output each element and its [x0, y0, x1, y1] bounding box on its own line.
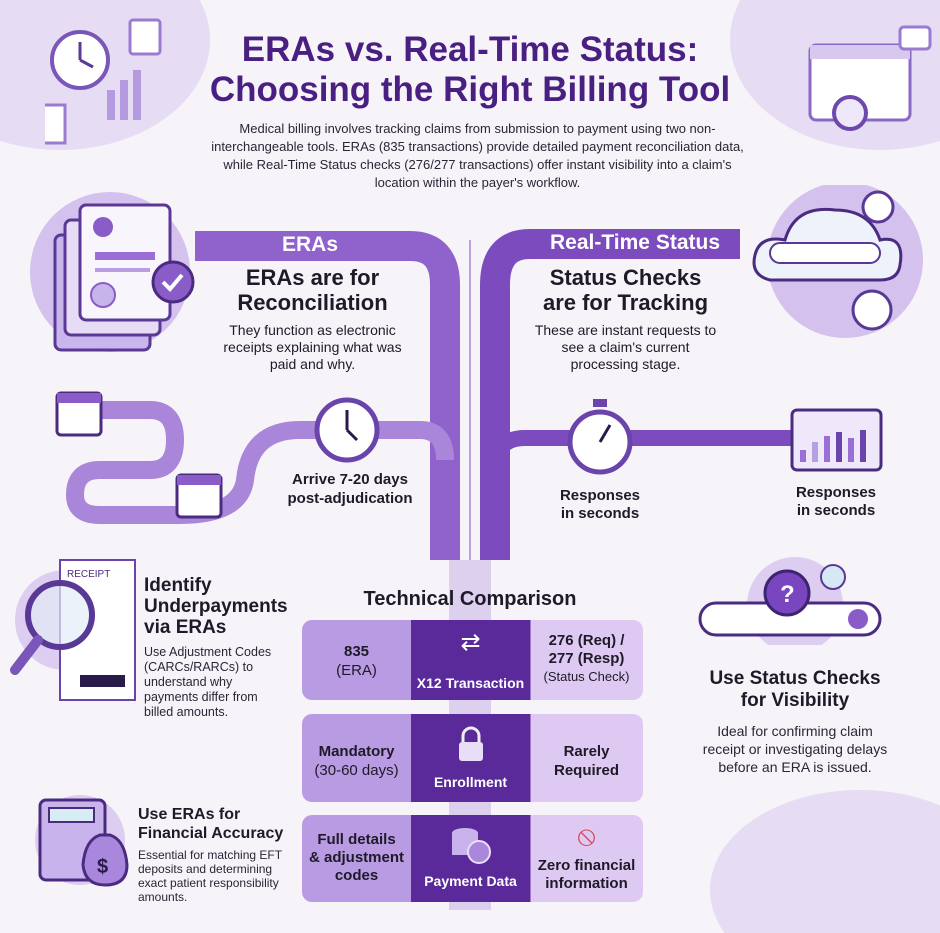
text block: identify underpayments: Use Adjustment Codes (CARCs/RARCs) to understand why payments differ from billed amounts.: [144, 645, 271, 719]
icon: ERA documents: [30, 192, 194, 352]
icon: calculator money bag: $: [97, 856, 108, 878]
title: ERAs vs. Real-Time Status:: [242, 30, 698, 69]
text block: ERAs reconciliation: [223, 265, 402, 372]
row: X12 transaction: (Status Check): [544, 669, 629, 684]
icon: calendars and clock: [56, 392, 380, 518]
text block: ERAs reconciliation: ERAs are for: [246, 265, 379, 290]
row: payment data: Full details: [317, 831, 396, 848]
text block: status checks visibility: Ideal for confirming claim: [717, 723, 873, 739]
text block: Status checks tracking: are for Tracking: [543, 290, 708, 315]
text block: financial accuracy: Essential for matching EFT deposits and determining exact patient responsibility amounts.: [138, 848, 282, 904]
row: enrollment: Enrollment: [434, 774, 507, 790]
row: X12 transaction: [302, 620, 643, 700]
text block: Status checks tracking: These are instant requests to see a claim's current processing stage.: [535, 322, 716, 372]
row: payment data: [302, 815, 643, 902]
text block: status checks visibility: Use Status Checks: [709, 668, 881, 689]
row: enrollment: [302, 714, 643, 802]
heading: technical comparison: Technical Comparison: [363, 588, 576, 610]
icon: cloud search: [752, 185, 923, 338]
decor icons top-left: [45, 18, 162, 144]
text block: ERAs reconciliation: They function as electronic receipts explaining what was paid and why.: [223, 322, 402, 372]
decor icons top-right: [808, 26, 932, 131]
text block: ERAs reconciliation: Reconciliation: [237, 290, 388, 315]
icon: chart window: [790, 408, 882, 472]
text: arrive 7-20 days: post-adjudication: [288, 490, 412, 507]
text: arrive 7-20 days: Arrive 7-20 days: [292, 471, 408, 488]
row: payment data: Payment Data: [424, 873, 517, 889]
row: X12 transaction: X12 Transaction: [417, 675, 524, 691]
text block: identify underpayments: Identify Underpayments via ERAs: [144, 575, 288, 638]
icon: receipt magnifier: RECEIPT: [67, 569, 110, 580]
row: X12 transaction: (ERA): [336, 662, 377, 679]
row: X12 transaction: 276 (Req) /: [549, 632, 624, 649]
row: payment data: ⦸: [577, 820, 596, 851]
row: enrollment: Rarely: [564, 743, 609, 760]
row: X12 transaction: 277 (Resp): [549, 650, 624, 667]
text block: status checks visibility: [703, 668, 887, 775]
row: payment data: codes: [335, 867, 378, 884]
row: X12 transaction: 835: [344, 643, 369, 660]
text block: status checks visibility: before an ERA is issued.: [718, 759, 872, 775]
row: payment data: Zero financial information: [538, 857, 635, 892]
title: Choosing the Right Billing Tool: [210, 70, 730, 109]
text: responses in seconds 2: Responses: [796, 484, 876, 501]
text: responses in seconds 1: [560, 487, 640, 522]
text: responses in seconds 2: [796, 484, 876, 519]
comparison table: [302, 620, 643, 902]
text block: status checks visibility: for Visibility: [741, 690, 849, 711]
text: arrive 7-20 days: [288, 471, 412, 507]
text: responses in seconds 1: Responses: [560, 487, 640, 504]
text block: financial accuracy: Use ERAs for Financial Accuracy: [138, 806, 283, 842]
icon: search question: ?: [780, 581, 795, 608]
text block: identify underpayments: [144, 575, 288, 719]
title: [210, 30, 730, 109]
intro text: Medical billing involves tracking claims from submission to payment using two non-interchangeable tools. ERAs (835 transactions) provide detailed payment reconciliation data, while Real-Time Status checks (276/277 transactions) offer instant visibility into a claim's location within the payer's workflow.: [211, 121, 744, 190]
text block: financial accuracy: [138, 806, 284, 904]
icon: receipt magnifier: [10, 559, 136, 701]
icon: calculator money bag: [35, 795, 128, 886]
heading: Real-Time Status band: Real-Time Status: [550, 231, 720, 254]
row: X12 transaction: ⇄: [460, 629, 481, 656]
icon: search question: [698, 557, 882, 645]
icon: stopwatch: [568, 399, 632, 474]
row: payment data: & adjustment: [309, 849, 404, 866]
row: enrollment: (30-60 days): [314, 762, 399, 779]
text block: Status checks tracking: Status Checks: [550, 265, 701, 290]
row: enrollment: Mandatory: [319, 743, 394, 760]
row: enrollment: Required: [554, 762, 619, 779]
text block: status checks visibility: receipt or investigating delays: [703, 741, 887, 757]
heading: ERAs band: ERAs: [282, 233, 338, 256]
text: responses in seconds 2: in seconds: [797, 502, 875, 519]
text: responses in seconds 1: in seconds: [561, 505, 639, 522]
text block: Status checks tracking: [535, 265, 716, 372]
